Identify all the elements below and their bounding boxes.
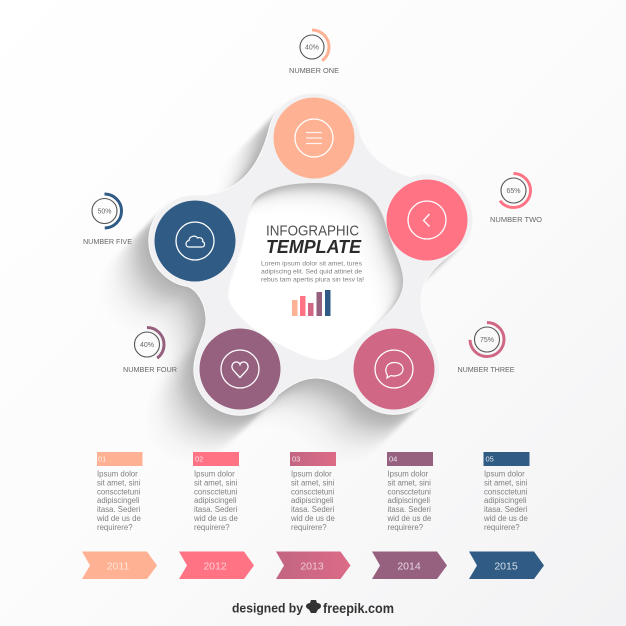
centre description text	[261, 260, 364, 284]
stat ring: number four: NUMBER FOUR	[123, 365, 178, 374]
column 02: Ipsum dolor	[194, 470, 235, 478]
column 02: conscctetuni	[194, 487, 238, 496]
column 02: requirere?	[194, 523, 230, 532]
arrow 2011: 2011	[107, 560, 129, 572]
column 02: itasa. Sederi	[194, 505, 238, 514]
column 03: sit amet, sini	[291, 478, 335, 488]
column 05: requirere?	[484, 523, 520, 532]
stat ring: number four: 40%	[140, 342, 154, 349]
column 03: 03	[292, 454, 300, 464]
stat ring: number three: 75%	[480, 337, 494, 344]
arrow 2012	[179, 552, 254, 579]
arrow 2015	[469, 552, 544, 579]
stat ring: number five: 50%	[97, 208, 112, 216]
column 05: 05	[486, 454, 494, 464]
column 05: wid de us de	[483, 514, 528, 523]
column 01: sit amet, sini	[97, 478, 141, 488]
column 03: wid de us de	[290, 514, 335, 523]
arrow 2011	[82, 552, 157, 579]
arrow 2015: 2015	[494, 560, 518, 572]
column 02	[193, 452, 239, 532]
column 04: conscctetuni	[388, 487, 431, 496]
column 02: adipiscingeli	[194, 496, 237, 505]
bar chart	[292, 290, 330, 316]
column 04: requirere?	[388, 523, 424, 532]
column 02: sit amet, sini	[194, 478, 238, 488]
column 05: sit amet, sini	[484, 478, 528, 488]
stat ring: number five: NUMBER FIVE	[83, 237, 132, 246]
stat ring: number one: NUMBER ONE	[289, 66, 339, 75]
stat ring: number five	[83, 194, 132, 246]
column 04: 04	[389, 454, 397, 464]
centre hole	[228, 183, 403, 360]
footer credit: designed by	[232, 600, 304, 616]
column 03: adipiscingeli	[291, 496, 334, 505]
centre description text: Lorem ipsum dolor sit amet, tures	[261, 260, 363, 268]
icon: freepik logo	[306, 600, 321, 613]
column 05	[483, 452, 530, 532]
node 5: navy circle with cloud icon	[154, 200, 236, 282]
column 05: adipiscingeli	[484, 496, 527, 505]
arrow 2012: 2012	[203, 560, 227, 572]
column 05: Ipsum dolor	[484, 470, 525, 478]
column 03: itasa. Sederi	[291, 505, 335, 514]
arrow 2014: 2014	[397, 560, 421, 572]
column 03: conscctetuni	[291, 487, 335, 496]
column 01: Ipsum dolor	[97, 470, 138, 478]
long shadow of central plate	[101, 96, 470, 463]
column 01: 01	[98, 454, 106, 464]
column 03: requirere?	[291, 523, 327, 532]
arrow 2014	[372, 552, 447, 579]
column 01: adipiscingeli	[97, 496, 140, 505]
column 02: wid de us de	[193, 514, 238, 523]
footer credit	[232, 600, 394, 616]
column 04: itasa. Sederi	[388, 505, 431, 514]
stat ring: number one: 40%	[305, 44, 319, 52]
arrow 2013	[276, 552, 350, 579]
column 01: conscctetuni	[97, 487, 141, 496]
node 4: plum circle with heart icon	[200, 328, 280, 410]
stat ring: number one	[289, 30, 339, 75]
node 2: coral circle with chevron icon	[386, 180, 468, 260]
stat ring: number three	[458, 322, 514, 374]
column 01	[96, 452, 142, 532]
stat ring: number two	[490, 174, 542, 224]
stat ring: number two: NUMBER TWO	[490, 215, 542, 224]
stat ring: number three: NUMBER THREE	[458, 365, 514, 374]
column 01: itasa. Sederi	[97, 505, 141, 514]
node 1: peach circle with menu icon	[274, 98, 354, 178]
column 03: Ipsum dolor	[291, 470, 332, 478]
arrow 2013: 2013	[300, 560, 324, 572]
column 05: itasa. Sederi	[484, 505, 528, 514]
column 04: sit amet, sini	[388, 478, 431, 488]
column 04: Ipsum dolor	[388, 470, 429, 478]
column 01: requirere?	[97, 523, 133, 532]
centre description text: rebus tam apertis piura sin tesv la!	[261, 276, 364, 284]
title: template: TEMPLATE	[266, 236, 362, 257]
column 01: wid de us de	[96, 514, 141, 523]
centre description text: adipiscing elit. Sed quid attinet de	[261, 268, 362, 276]
footer credit: freepik.com	[323, 600, 394, 616]
column 04: adipiscingeli	[388, 496, 430, 505]
column 04: wid de us de	[386, 514, 431, 523]
panel: central star plate	[148, 94, 472, 416]
column 04	[386, 452, 433, 532]
stat ring: number two: 65%	[506, 188, 521, 195]
title: infographic: INFOGRAPHIC	[266, 224, 359, 240]
node 3: rose circle with speech bubble icon	[354, 328, 434, 410]
column 05: conscctetuni	[484, 487, 528, 496]
stat ring: number four	[123, 328, 178, 374]
column 02: 02	[195, 454, 203, 464]
column 03	[290, 452, 336, 532]
